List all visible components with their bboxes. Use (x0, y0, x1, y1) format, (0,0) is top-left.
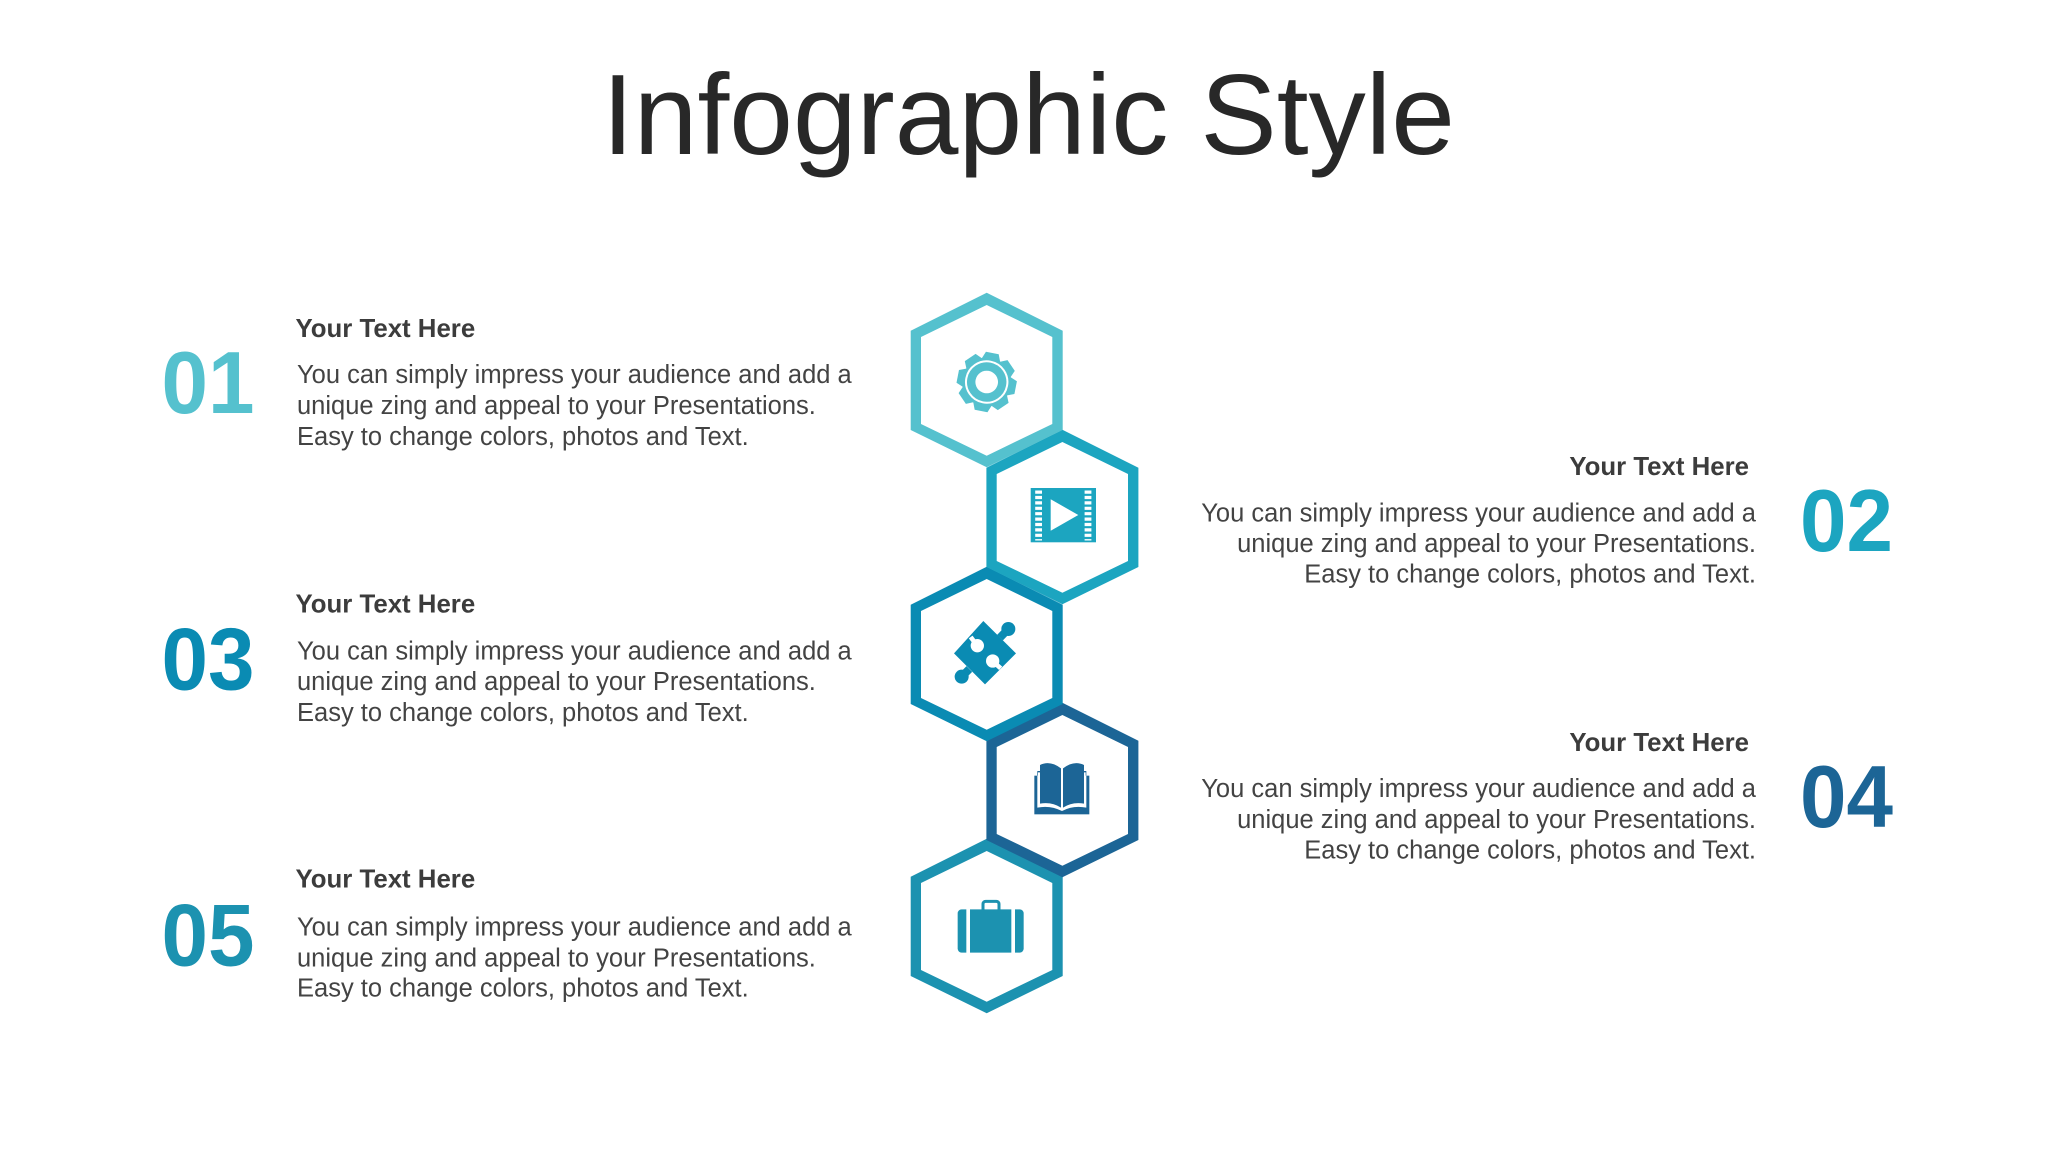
body 01: You can simply impress your audience and add a (297, 361, 853, 389)
heading 02: Your Text Here (1569, 453, 1749, 481)
body 04: Easy to change colors, photos and Text. (1304, 836, 1756, 864)
heading 01: Your Text Here (296, 315, 475, 343)
body 03: unique zing and appeal to your Presentations. (297, 668, 816, 696)
body 03: Easy to change colors, photos and Text. (297, 699, 749, 727)
hexagon 1 (911, 293, 1063, 467)
hexagon 4 (986, 703, 1138, 877)
number 03: 03 (162, 611, 254, 709)
item 03 (162, 590, 853, 727)
body 05: unique zing and appeal to your Presentations. (297, 944, 816, 972)
heading 03: Your Text Here (296, 590, 475, 618)
item 05 (162, 866, 853, 1002)
body 04: unique zing and appeal to your Presentations. (1237, 806, 1756, 834)
body 02: unique zing and appeal to your Presentations. (1237, 530, 1756, 558)
body 04: You can simply impress your audience and add a (1201, 775, 1757, 803)
number 04: 04 (1800, 748, 1893, 846)
number 02: 02 (1800, 472, 1893, 570)
icon: film with play button (1031, 488, 1096, 542)
heading 05: Your Text Here (296, 866, 475, 894)
body 05: You can simply impress your audience and add a (297, 914, 853, 942)
icon: puzzle piece (954, 621, 1016, 684)
body 02: Easy to change colors, photos and Text. (1304, 560, 1756, 588)
item 02 (1201, 453, 1893, 588)
number 01: 01 (162, 334, 254, 432)
body 01: Easy to change colors, photos and Text. (297, 423, 749, 451)
item 01 (162, 315, 853, 451)
body 05: Easy to change colors, photos and Text. (297, 974, 749, 1002)
icon: open book (1034, 763, 1089, 814)
body 02: You can simply impress your audience and add a (1201, 500, 1757, 528)
icon: briefcase (958, 901, 1024, 954)
body 03: You can simply impress your audience and add a (297, 638, 853, 666)
icon: gear (952, 347, 1021, 417)
item 04 (1201, 729, 1893, 864)
number 05: 05 (162, 887, 254, 985)
hexagon chain (911, 293, 1138, 1013)
hexagon 5 (911, 839, 1063, 1013)
title: Infographic Style (602, 51, 1455, 179)
hexagon 3 (911, 567, 1063, 741)
body 01: unique zing and appeal to your Presentations. (297, 392, 816, 420)
heading 04: Your Text Here (1569, 729, 1749, 757)
hexagon 2 (986, 430, 1138, 604)
